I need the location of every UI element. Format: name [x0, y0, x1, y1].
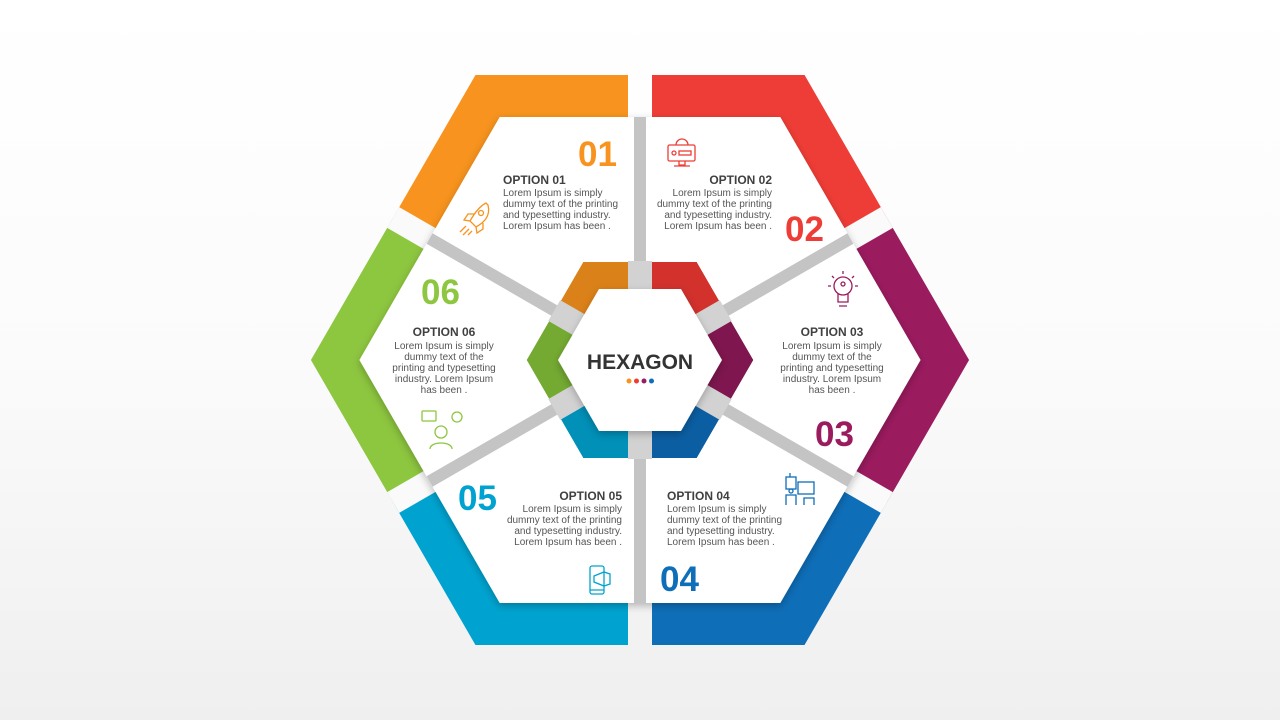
option 05: [458, 479, 622, 594]
option 02: [657, 139, 824, 249]
option 03: dummy text of the: [792, 352, 872, 363]
option 02: Lorem Ipsum is simply: [673, 188, 772, 199]
option 03: industry. Lorem Ipsum: [783, 374, 881, 385]
hexagon diagram: [270, 4, 1010, 716]
option 05: Lorem Ipsum has been .: [514, 537, 622, 548]
option 01: [460, 135, 618, 235]
option 04: Lorem Ipsum is simply: [667, 504, 766, 515]
option 03: Lorem Ipsum is simply: [782, 341, 882, 352]
option 02: Lorem Ipsum has been .: [664, 221, 772, 232]
option 01: dummy text of the printing: [503, 199, 618, 210]
white panels: [324, 56, 956, 664]
option 02: OPTION 02: [709, 173, 772, 187]
option 01: and typesetting industry.: [503, 210, 611, 221]
option 06: [392, 273, 496, 449]
option 01: Lorem Ipsum has been .: [503, 221, 611, 232]
option 05: 05: [458, 479, 497, 518]
option 05: OPTION 05: [559, 489, 622, 503]
center hexagon: [558, 289, 722, 431]
icon: person ideas: [422, 411, 462, 449]
option 04: Lorem Ipsum has been .: [667, 537, 775, 548]
option 04: and typesetting industry.: [667, 526, 775, 537]
option 05: Lorem Ipsum is simply: [523, 504, 622, 515]
option 06: industry. Lorem Ipsum: [395, 374, 493, 385]
option 04: 04: [660, 560, 699, 599]
icon: phone megaphone: [590, 566, 610, 594]
option 06: has been .: [421, 385, 467, 396]
option 03: 03: [815, 415, 854, 454]
option 02: dummy text of the printing: [657, 199, 772, 210]
option 04: [660, 473, 814, 599]
center hexagon: HEXAGON: [587, 351, 693, 374]
option 03: printing and typesetting: [780, 363, 884, 374]
outer colored ring: [270, 4, 1010, 716]
icon: presenter: [786, 473, 814, 505]
option 01: OPTION 01: [503, 173, 566, 187]
option 04: OPTION 04: [667, 489, 730, 503]
option 03: OPTION 03: [801, 325, 864, 339]
option 02: 02: [785, 210, 824, 249]
option 01: 01: [578, 135, 617, 174]
option 01: Lorem Ipsum is simply: [503, 188, 602, 199]
icon: gear monitor: [668, 139, 695, 166]
option 02: and typesetting industry.: [664, 210, 772, 221]
option 03: has been .: [809, 385, 855, 396]
option 06: printing and typesetting: [392, 363, 496, 374]
option 05: dummy text of the printing: [507, 515, 622, 526]
option 04: dummy text of the printing: [667, 515, 782, 526]
option 06: Lorem Ipsum is simply: [394, 341, 494, 352]
inner colored ring: [513, 237, 767, 483]
icon: bulb: [828, 271, 858, 306]
option 03: [780, 271, 884, 454]
option 06: dummy text of the: [404, 352, 484, 363]
icon: rocket: [460, 203, 489, 235]
option 06: 06: [421, 273, 460, 312]
option 05: and typesetting industry.: [514, 526, 622, 537]
option 06: OPTION 06: [413, 325, 476, 339]
